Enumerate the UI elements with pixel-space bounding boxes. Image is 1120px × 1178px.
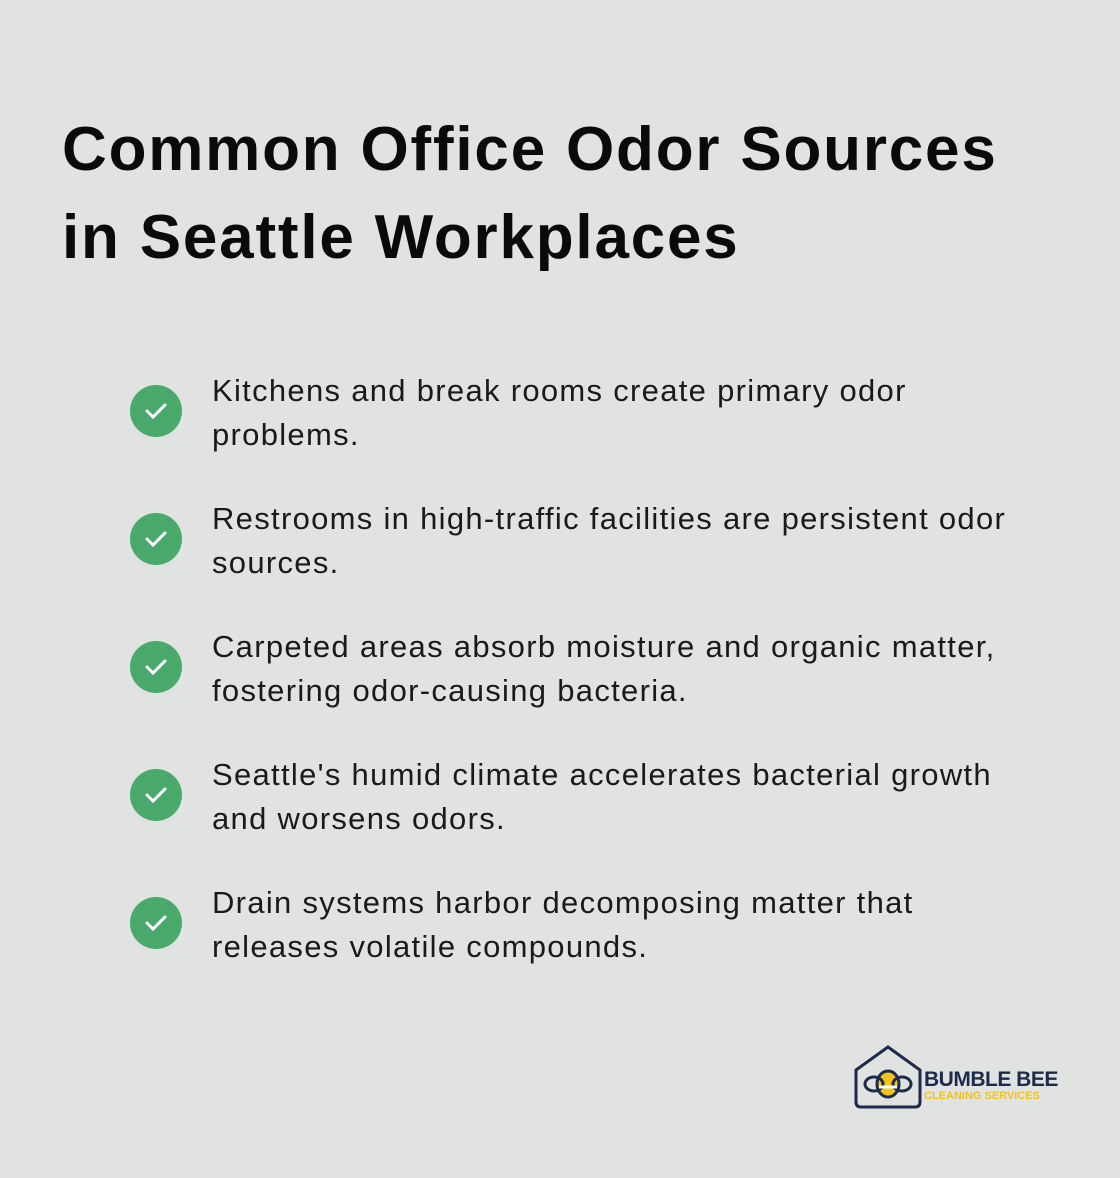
item 5 [130, 885, 914, 964]
item 1 [130, 373, 907, 452]
icon: check [130, 513, 182, 565]
text [212, 373, 907, 452]
icon: check [130, 769, 182, 821]
text: fostering odor-causing bacteria. [212, 673, 688, 708]
text [212, 501, 1006, 580]
text [212, 757, 992, 836]
icon: check [130, 385, 182, 437]
text: Seattle's humid climate accelerates bacterial growth [212, 757, 992, 792]
logo text: BUMBLE BEE [924, 1068, 1058, 1091]
text: releases volatile compounds. [212, 929, 648, 964]
text: and worsens odors. [212, 801, 506, 836]
title: Common Office Odor Sources [62, 115, 998, 184]
logo [854, 1045, 1058, 1108]
item 4 [130, 757, 992, 836]
logo text [924, 1068, 1058, 1102]
text [212, 885, 914, 964]
icon: check [130, 897, 182, 949]
logo text: CLEANING SERVICES [924, 1090, 1040, 1102]
text: problems. [212, 417, 360, 452]
text: sources. [212, 545, 340, 580]
item 3 [130, 629, 996, 708]
title [62, 115, 998, 272]
icon: bee house [854, 1045, 922, 1108]
text: Drain systems harbor decomposing matter that [212, 885, 914, 920]
item 2 [130, 501, 1006, 580]
text: Kitchens and break rooms create primary odor [212, 373, 907, 408]
icon: check [130, 641, 182, 693]
title: in Seattle Workplaces [62, 203, 740, 272]
text: Restrooms in high-traffic facilities are persistent odor [212, 501, 1006, 536]
text: Carpeted areas absorb moisture and organic matter, [212, 629, 996, 664]
text [212, 629, 996, 708]
